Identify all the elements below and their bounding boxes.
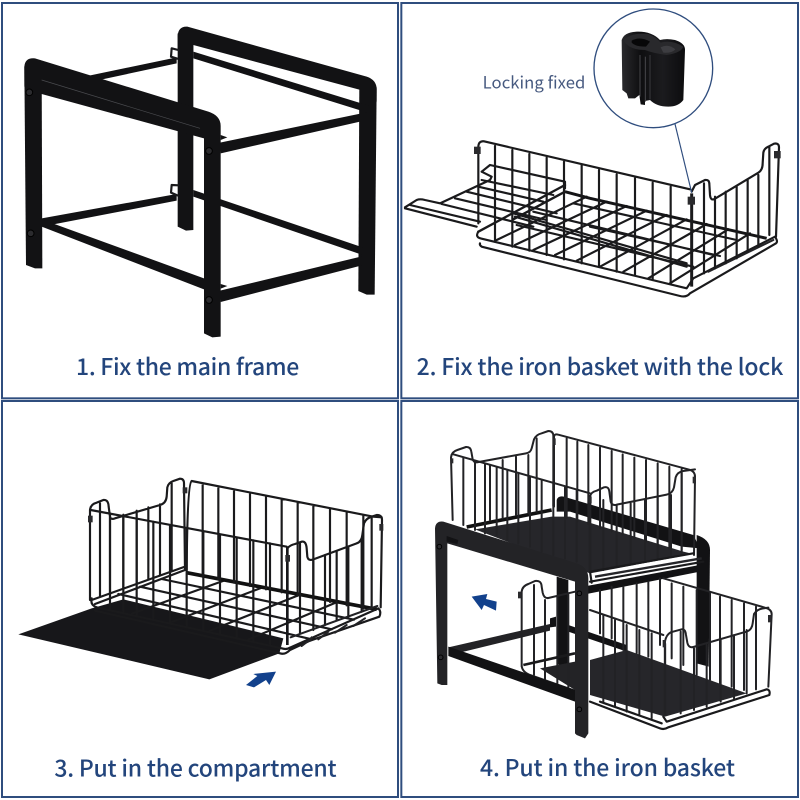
upper basket right side [590, 469, 695, 570]
shelf top [475, 517, 693, 573]
clips [171, 48, 227, 289]
illustration: black metal frame [24, 27, 377, 337]
illustration: back of frame [435, 431, 772, 738]
caption: step 3: 3. Put in the compartment [54, 750, 337, 784]
right panel [692, 143, 779, 273]
lower basket end panel [540, 662, 575, 690]
lower basket front [590, 610, 663, 718]
lower basket clips [450, 438, 771, 647]
left side panel [90, 479, 185, 604]
left flap [405, 165, 565, 227]
bolts [437, 544, 582, 712]
label: locking fixed: Locking fixed [483, 70, 585, 94]
icon: lock clip [622, 32, 685, 107]
back panel [478, 141, 690, 283]
base frame [91, 598, 380, 654]
lock clips [88, 487, 383, 562]
panel: step 3 compartment [2, 401, 398, 797]
diagonal front edge [478, 185, 565, 232]
panel: step 1 main frame [2, 3, 398, 398]
caption: step 2: 2. Fix the iron basket with the lock [417, 348, 783, 382]
illustration: wire basket [405, 141, 781, 296]
lower basket floor [590, 650, 747, 717]
base frame [477, 232, 777, 296]
lock clips [474, 147, 781, 205]
floor grid [497, 197, 750, 283]
bolts [26, 89, 212, 303]
callout circle [594, 9, 713, 128]
back panel [187, 481, 382, 609]
arrow: slide in [472, 594, 497, 611]
right side panel [287, 515, 382, 633]
caption: step 4: 4. Put in the iron basket [480, 749, 735, 783]
upper basket back panel [554, 434, 695, 555]
front of frame [448, 647, 575, 702]
caption: step 1: 1. Fix the main frame [76, 348, 299, 382]
callout line [675, 124, 692, 193]
illustration: mat under basket [18, 479, 383, 679]
upper basket left side [451, 431, 553, 520]
upper basket front [453, 454, 590, 562]
floor grid [118, 579, 354, 640]
lower basket base rail [590, 689, 770, 729]
panel: step 2 iron basket [401, 3, 798, 398]
panel: step 4 iron basket [401, 401, 798, 797]
upper basket base rail [590, 553, 703, 583]
arrow: push in [246, 672, 276, 687]
lower basket back [600, 578, 772, 690]
front panel [91, 510, 287, 644]
lower basket right side [665, 608, 768, 713]
